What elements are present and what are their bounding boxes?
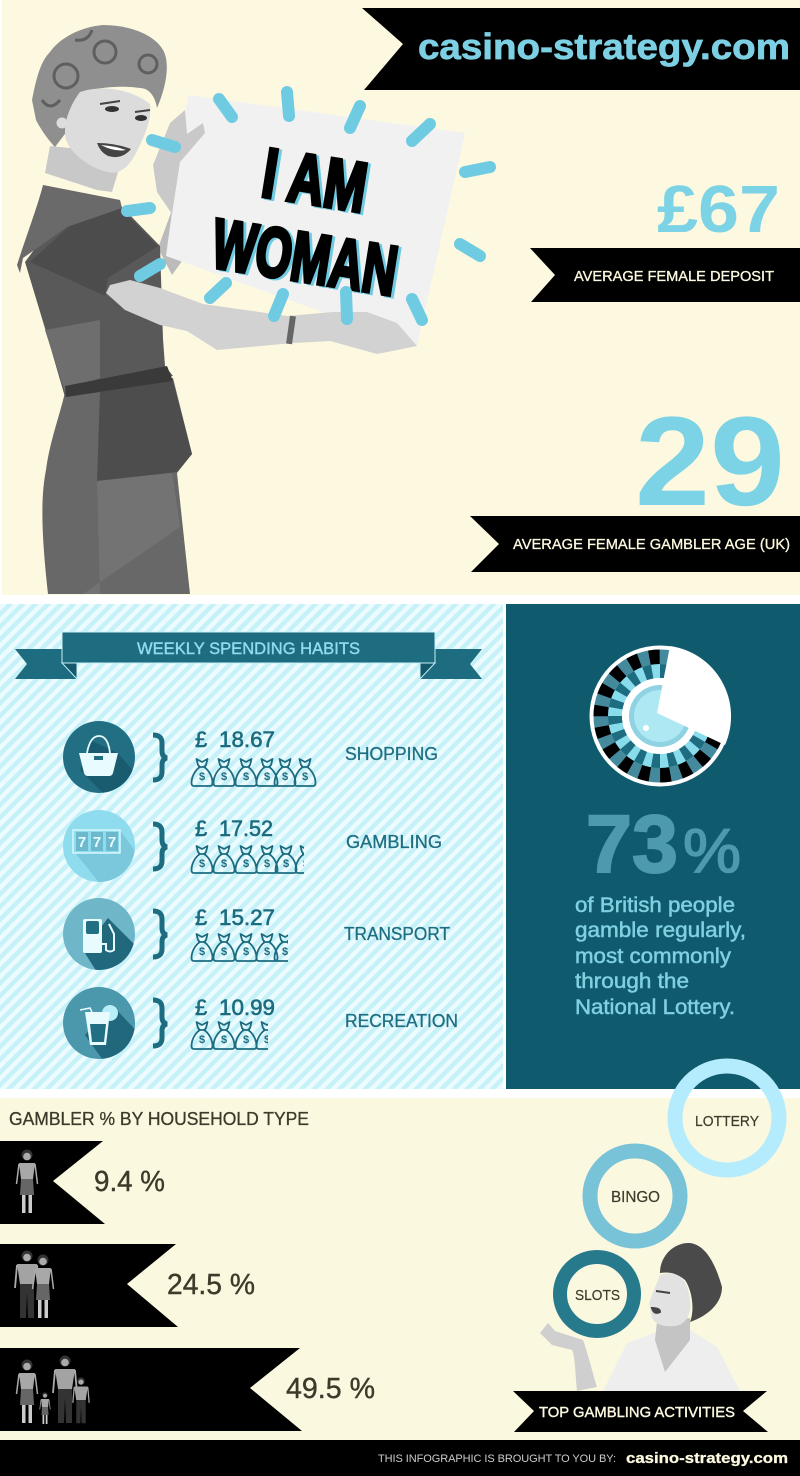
money bags: $ — [199, 858, 205, 870]
woman: belt — [65, 366, 173, 397]
activity: bingo: BINGO — [611, 1189, 660, 1206]
money bags: $ — [199, 946, 205, 958]
icon: fuel pump — [63, 898, 135, 970]
money bags: $ — [302, 771, 308, 783]
stat: average deposit: £67 — [657, 172, 780, 247]
description text: of British people — [575, 894, 735, 917]
money bags — [192, 846, 316, 873]
amount: 18.67 — [219, 727, 275, 752]
footer: casino-strategy.com — [626, 1450, 788, 1467]
stat: 73%: 73 — [586, 799, 678, 890]
stat: average age — [470, 390, 800, 572]
description text: National Lottery. — [575, 996, 735, 1019]
woman: hair curls — [42, 30, 157, 106]
icon: drink — [63, 987, 135, 1059]
activity: bingo — [590, 1151, 680, 1241]
money bags — [192, 759, 316, 786]
sign wording — [207, 134, 406, 312]
amount: 17.52 — [219, 816, 273, 841]
activity: lottery — [675, 1066, 779, 1170]
activity: slots: SLOTS — [575, 1287, 620, 1304]
woman: skirt drape — [83, 473, 180, 594]
brace — [153, 911, 167, 957]
woman: neck and chest — [45, 146, 118, 192]
illustration: woman holding sign — [17, 25, 490, 594]
woman: bodice — [25, 205, 173, 397]
ribbon heading: WEEKLY SPENDING HABITS — [137, 640, 360, 658]
footer — [0, 1440, 800, 1476]
stat: 73%: % — [683, 817, 741, 886]
ribbon heading — [15, 632, 482, 679]
panel: 73 percent — [506, 604, 800, 1089]
woman: face — [649, 1273, 690, 1326]
label: GAMBLING — [346, 832, 442, 852]
woman: upper hand — [153, 110, 205, 214]
money bags: $ — [221, 946, 227, 958]
money bags: $ — [282, 771, 288, 783]
stat: average age: AVERAGE FEMALE GAMBLER AGE (UK) — [513, 537, 790, 553]
amount — [195, 727, 275, 752]
money bags: $ — [221, 771, 227, 783]
footer: THIS INFOGRAPHIC IS BROUGHT TO YOU BY: — [378, 1453, 616, 1465]
description text — [575, 894, 746, 1019]
panel: weekly spending habits — [0, 604, 503, 1089]
money bags: $ — [243, 946, 249, 958]
woman: bodice lit panel — [45, 320, 100, 392]
bar: couple 24.5% — [0, 1244, 255, 1327]
bar: family 49.5%: 49.5 % — [286, 1373, 375, 1405]
brace — [153, 1000, 167, 1046]
row: recreation — [63, 987, 457, 1059]
bar: family 49.5% — [0, 1348, 375, 1431]
amount — [195, 905, 275, 930]
sign wording: I AM — [260, 135, 375, 228]
banner: top gambling activities: TOP GAMBLING ACTIVITIES — [539, 1404, 735, 1421]
money bags: $ — [264, 858, 270, 870]
stat: 73% — [586, 799, 741, 890]
label: RECREATION — [345, 1011, 458, 1031]
icon: slot machine: 7 — [93, 834, 101, 851]
sign — [166, 95, 465, 346]
icon: handbag — [63, 721, 135, 793]
icon: roulette wheel — [590, 646, 731, 786]
woman: hair — [32, 25, 167, 147]
amount — [195, 995, 275, 1020]
brace — [153, 824, 167, 869]
money bags: $ — [282, 946, 288, 958]
banner: top gambling activities — [513, 1391, 768, 1432]
row: transport — [63, 898, 450, 970]
stat: average age: 29 — [635, 390, 785, 532]
money bags: $ — [264, 1034, 270, 1046]
amount: £ — [195, 905, 207, 930]
row: gambling — [63, 810, 441, 882]
site banner: casino-strategy.com — [418, 26, 790, 67]
panel: household and activities — [0, 1066, 800, 1440]
site banner — [362, 8, 800, 90]
woman: far arm — [158, 210, 190, 275]
description text: gamble regularly, — [575, 919, 746, 942]
amount: £ — [195, 995, 207, 1020]
heading: household type: GAMBLER % BY HOUSEHOLD TYPE — [9, 1109, 309, 1129]
money bags: $ — [199, 1034, 205, 1046]
bar: single 9.4% — [0, 1141, 165, 1224]
illustration: woman juggling — [540, 1243, 740, 1391]
woman: watch — [286, 316, 296, 344]
activity: slots — [560, 1257, 634, 1331]
money bags: $ — [264, 771, 270, 783]
woman: arm — [540, 1323, 597, 1391]
woman: peplum — [97, 381, 192, 481]
woman: blouse — [603, 1330, 740, 1391]
money bags: $ — [264, 946, 270, 958]
row: shopping — [63, 721, 437, 793]
bar: single 9.4%: 9.4 % — [94, 1166, 165, 1198]
woman: forearm and lower hand — [106, 280, 417, 354]
sign wording: WOMAN — [207, 204, 403, 310]
money bags: $ — [221, 858, 227, 870]
woman: hair — [660, 1243, 722, 1322]
money bags: $ — [221, 1034, 227, 1046]
sign wording: I AM — [257, 134, 372, 227]
money bags: $ — [243, 858, 249, 870]
amount: 10.99 — [219, 995, 275, 1020]
amount: 15.27 — [219, 905, 275, 930]
panel: hero — [2, 0, 800, 595]
money bags — [192, 1022, 278, 1049]
woman: skirt — [42, 378, 192, 594]
woman: eyes and smile — [97, 101, 150, 157]
label: TRANSPORT — [344, 924, 450, 944]
icon: slot machine: 7 — [78, 834, 86, 851]
woman: face — [65, 88, 150, 173]
amount: £ — [195, 727, 207, 752]
icon: slot machine — [63, 810, 135, 882]
bar: couple 24.5%: 24.5 % — [167, 1269, 255, 1301]
money bags: $ — [243, 1034, 249, 1046]
money bags: $ — [283, 858, 289, 870]
money bags: $ — [243, 771, 249, 783]
money bags — [192, 934, 296, 961]
description text: most commonly — [575, 945, 732, 968]
woman: earring — [56, 118, 68, 128]
description text: through the — [575, 970, 689, 993]
woman: facial features — [652, 1291, 670, 1313]
label: SHOPPING — [345, 744, 438, 764]
activity: lottery: LOTTERY — [695, 1114, 759, 1130]
amount: £ — [195, 816, 207, 841]
woman: neck — [655, 1318, 690, 1372]
brace — [153, 735, 167, 780]
money bags: $ — [199, 771, 205, 783]
woman: sleeve — [30, 208, 158, 296]
amount — [195, 816, 273, 841]
sign wording: WOMAN — [210, 206, 406, 312]
rays around the sign — [127, 92, 490, 320]
icon: slot machine: 7 — [108, 834, 116, 851]
woman: collar — [17, 185, 122, 273]
stat: average deposit — [530, 172, 800, 302]
stat: average deposit: AVERAGE FEMALE DEPOSIT — [574, 269, 774, 285]
money bags: $ — [303, 858, 309, 870]
